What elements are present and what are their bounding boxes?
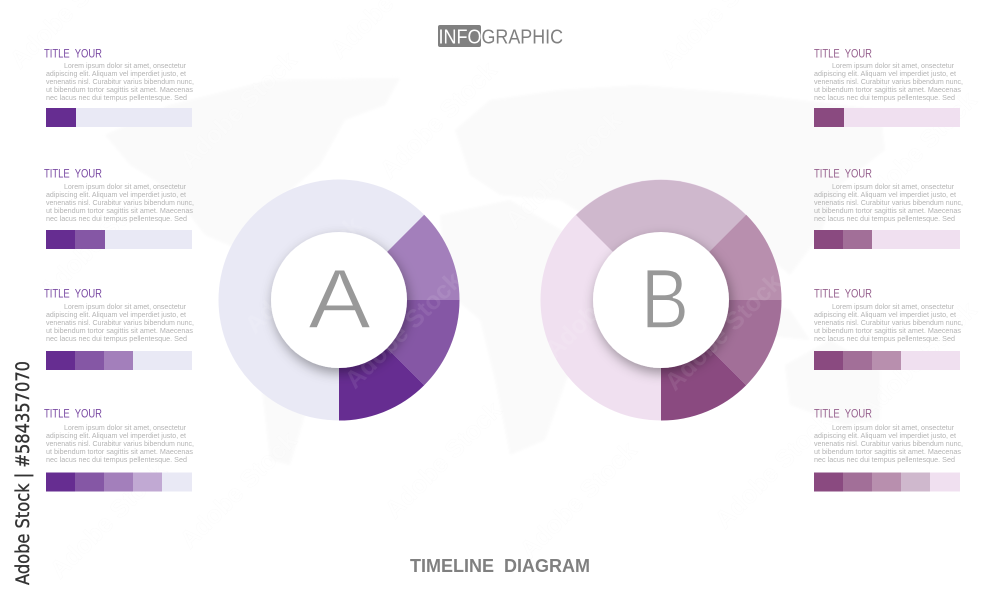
item A1: TITLE YOUR bbox=[44, 46, 102, 60]
item A2: TITLE YOUR bbox=[44, 166, 102, 180]
item B2: nec lacus nec dui tempus pellentesque. Sed bbox=[814, 214, 955, 223]
heading: infographic: INFO bbox=[438, 26, 482, 48]
item B2: venenatis nisl. Curabitur varius bibendum nunc, bbox=[814, 198, 963, 207]
item B4: ut bibendum tortor sagittis sit amet. Maecenas bbox=[814, 447, 961, 456]
item B3: venenatis nisl. Curabitur varius bibendum nunc, bbox=[814, 318, 963, 327]
item B2: Lorem ipsum dolor sit amet, onsectetur bbox=[832, 182, 954, 191]
watermark over the donuts bbox=[239, 211, 787, 396]
watermark pattern: Adobe Stock bbox=[174, 46, 302, 174]
item B4: TITLE YOUR bbox=[814, 406, 872, 420]
item B1: nec lacus nec dui tempus pellentesque. Sed bbox=[814, 93, 955, 102]
item A4: ut bibendum tortor sagittis sit amet. Maecenas bbox=[46, 447, 193, 456]
watermark pattern: Adobe Stock bbox=[174, 426, 302, 554]
item B1: venenatis nisl. Curabitur varius bibendum nunc, bbox=[814, 77, 963, 86]
item A3: TITLE YOUR bbox=[44, 286, 102, 300]
watermark over the donuts: Adobe Stock bbox=[539, 236, 667, 364]
item B4 bbox=[814, 406, 963, 492]
item A3: ut bibendum tortor sagittis sit amet. Maecenas bbox=[46, 326, 193, 335]
item B4: nec lacus nec dui tempus pellentesque. Sed bbox=[814, 455, 955, 464]
item A2 bbox=[44, 166, 194, 249]
item A3: adipiscing elit. Aliquam vel imperdiet justo, et bbox=[46, 310, 187, 319]
item B3: adipiscing elit. Aliquam vel imperdiet justo, et bbox=[814, 310, 957, 319]
item A3 bbox=[44, 286, 194, 370]
item A4: nec lacus nec dui tempus pellentesque. Sed bbox=[46, 455, 187, 464]
item A4: venenatis nisl. Curabitur varius bibendum nunc, bbox=[46, 439, 194, 448]
stock id label: Adobe Stock | #584357070 bbox=[13, 361, 34, 585]
chart: donut A: A bbox=[308, 252, 371, 346]
watermark pattern: Adobe Stock bbox=[854, 86, 982, 214]
watermark pattern: Adobe Stock bbox=[854, 296, 982, 424]
panel: right list B bbox=[814, 46, 963, 492]
item A2: nec lacus nec dui tempus pellentesque. Sed bbox=[46, 214, 187, 223]
watermark over the donuts: Adobe Stock bbox=[339, 266, 467, 394]
world map background bbox=[105, 78, 885, 465]
item B4: adipiscing elit. Aliquam vel imperdiet justo, et bbox=[814, 431, 957, 440]
item B2: TITLE YOUR bbox=[814, 166, 872, 180]
item B1 bbox=[814, 46, 963, 127]
chart: donut B bbox=[540, 180, 782, 420]
watermark pattern: Adobe Stock bbox=[44, 456, 172, 584]
item A2: venenatis nisl. Curabitur varius bibendum nunc, bbox=[46, 198, 194, 207]
heading: infographic: GRAPHIC bbox=[482, 26, 563, 48]
item B1: TITLE YOUR bbox=[814, 46, 872, 60]
item A4: Lorem ipsum dolor sit amet, onsectetur bbox=[64, 423, 186, 432]
item B3 bbox=[814, 286, 963, 370]
item B1: Lorem ipsum dolor sit amet, onsectetur bbox=[832, 61, 954, 70]
chart: donut B: B bbox=[641, 252, 689, 346]
item B3: Lorem ipsum dolor sit amet, onsectetur bbox=[832, 302, 954, 311]
watermark over the donuts: Adobe Stock bbox=[659, 268, 787, 396]
item B1: ut bibendum tortor sagittis sit amet. Maecenas bbox=[814, 85, 961, 94]
item B2 bbox=[814, 166, 963, 249]
item A2: Lorem ipsum dolor sit amet, onsectetur bbox=[64, 182, 186, 191]
item A4: adipiscing elit. Aliquam vel imperdiet justo, et bbox=[46, 431, 187, 440]
item A2: adipiscing elit. Aliquam vel imperdiet justo, et bbox=[46, 190, 187, 199]
item A1: venenatis nisl. Curabitur varius bibendum nunc, bbox=[46, 77, 194, 86]
item B2: ut bibendum tortor sagittis sit amet. Maecenas bbox=[814, 206, 961, 215]
watermark pattern: Adobe Stock bbox=[34, 176, 162, 304]
chart: donut A bbox=[218, 180, 460, 420]
item A3: nec lacus nec dui tempus pellentesque. Sed bbox=[46, 334, 187, 343]
item A4 bbox=[44, 406, 194, 492]
item A1: nec lacus nec dui tempus pellentesque. Sed bbox=[46, 93, 187, 102]
watermark pattern: Adobe Stock bbox=[709, 406, 837, 534]
item A1: ut bibendum tortor sagittis sit amet. Maecenas bbox=[46, 85, 193, 94]
item A3: Lorem ipsum dolor sit amet, onsectetur bbox=[64, 302, 186, 311]
watermark pattern: Adobe Stock bbox=[374, 56, 502, 184]
watermark pattern: Adobe Stock bbox=[514, 436, 642, 564]
item B3: TITLE YOUR bbox=[814, 286, 872, 300]
item B3: ut bibendum tortor sagittis sit amet. Maecenas bbox=[814, 326, 961, 335]
item B2: adipiscing elit. Aliquam vel imperdiet justo, et bbox=[814, 190, 957, 199]
watermark pattern: Adobe Stock bbox=[499, 106, 627, 234]
heading: infographic bbox=[438, 25, 563, 48]
item A4: TITLE YOUR bbox=[44, 406, 102, 420]
item A1 bbox=[44, 46, 194, 127]
item B3: nec lacus nec dui tempus pellentesque. Sed bbox=[814, 334, 955, 343]
item B4: venenatis nisl. Curabitur varius bibendum nunc, bbox=[814, 439, 963, 448]
footer title: TIMELINE DIAGRAM bbox=[410, 556, 590, 576]
panel: left list A bbox=[44, 46, 194, 492]
item A1: Lorem ipsum dolor sit amet, onsectetur bbox=[64, 61, 186, 70]
item A2: ut bibendum tortor sagittis sit amet. Maecenas bbox=[46, 206, 193, 215]
item B4: Lorem ipsum dolor sit amet, onsectetur bbox=[832, 423, 954, 432]
watermark over the donuts: Adobe Stock bbox=[239, 211, 367, 339]
item A3: venenatis nisl. Curabitur varius bibendum nunc, bbox=[46, 318, 194, 327]
watermark pattern: Adobe Stock bbox=[379, 396, 507, 524]
item A1: adipiscing elit. Aliquam vel imperdiet justo, et bbox=[46, 69, 187, 78]
item B1: adipiscing elit. Aliquam vel imperdiet justo, et bbox=[814, 69, 957, 78]
